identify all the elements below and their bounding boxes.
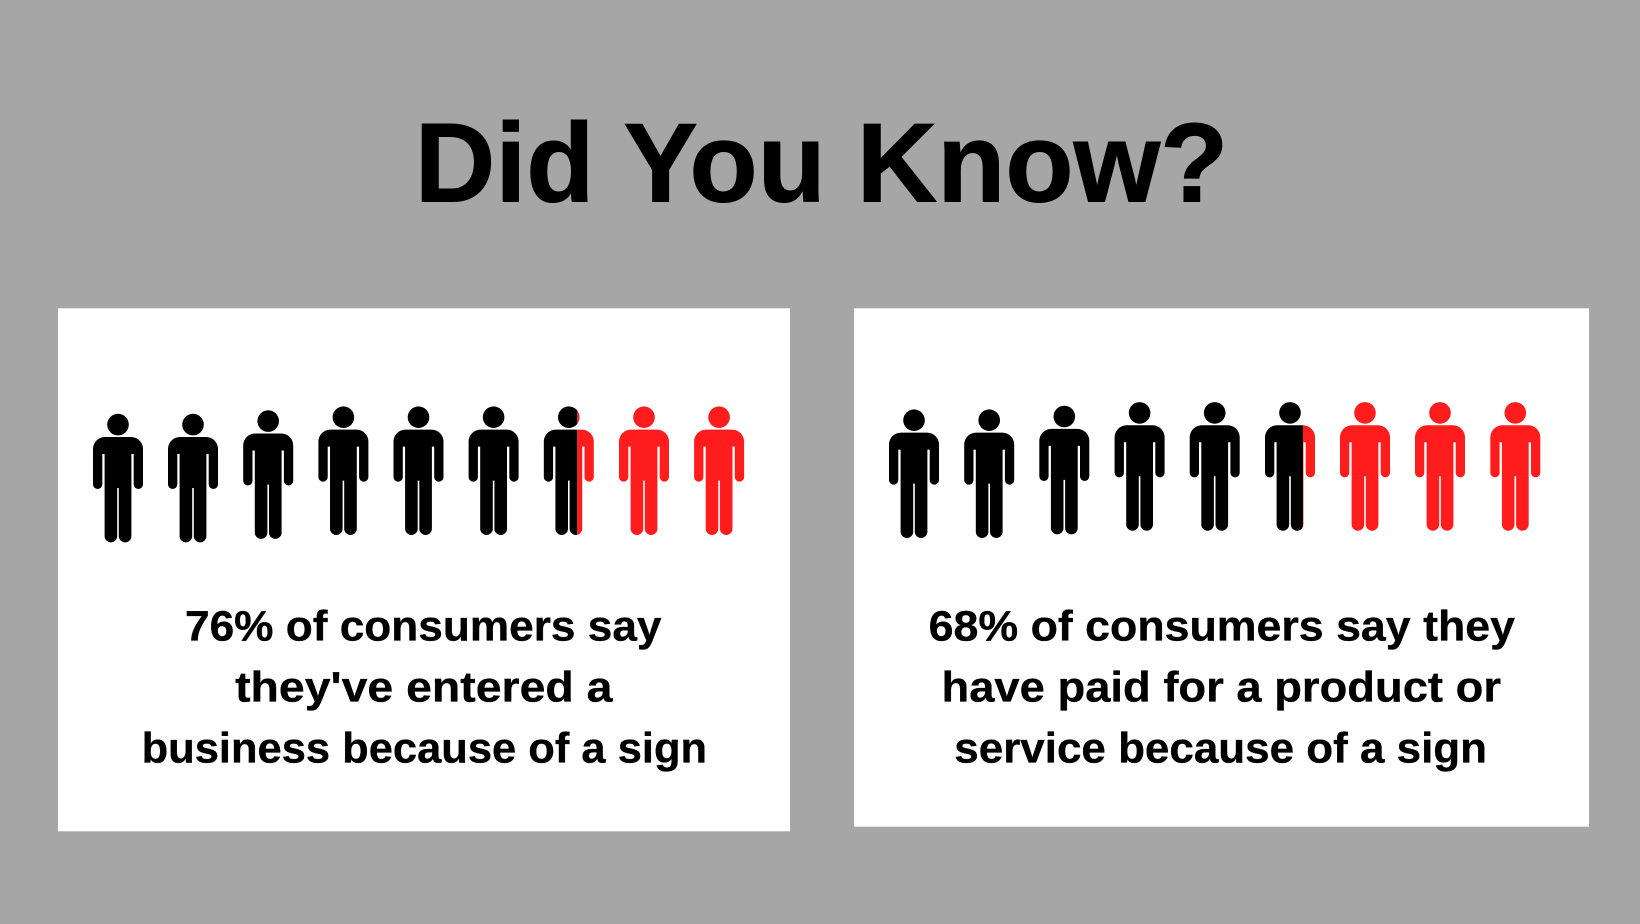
- text: 68 percent statement: service because of a sign: [954, 724, 1487, 772]
- person 3 black: [243, 410, 293, 539]
- person 9 red: [694, 406, 744, 535]
- person 7 split black and red: [544, 406, 594, 535]
- title: Did You Know?: [415, 101, 1228, 226]
- person 5 black: [394, 406, 444, 535]
- text: 68 percent statement: 68% of consumers say they: [929, 603, 1515, 651]
- person 4 black: [318, 406, 368, 535]
- text: 76 percent statement: 76% of consumers say: [185, 603, 662, 651]
- text: 68 percent statement: [929, 603, 1515, 772]
- person 5 black: [1190, 402, 1240, 531]
- person 9 red: [1490, 402, 1540, 531]
- person 8 red: [1415, 402, 1465, 531]
- person 6 split black and red: [1265, 402, 1315, 531]
- person 2 black: [964, 409, 1014, 538]
- text: 76 percent statement: [142, 603, 707, 772]
- person 1 black: [93, 414, 143, 542]
- person 8 red: [619, 406, 669, 535]
- panel: 68% of consumers: [854, 308, 1589, 827]
- person 7 red: [1340, 402, 1390, 531]
- panel: 76% of consumers: [58, 308, 790, 831]
- person 6 black: [469, 406, 519, 535]
- person 3 black: [1039, 406, 1089, 534]
- person 1 black: [889, 409, 939, 538]
- person 4 black: [1115, 402, 1165, 531]
- pictogram: 68 percent row of nine people: [889, 402, 1540, 538]
- text: 76 percent statement: they've entered a: [235, 664, 614, 712]
- person 2 black: [168, 414, 218, 542]
- text: 68 percent statement: have paid for a product or: [942, 664, 1501, 712]
- pictogram: 76 percent row of nine people: [93, 406, 744, 542]
- text: 76 percent statement: business because of a sign: [142, 724, 707, 772]
